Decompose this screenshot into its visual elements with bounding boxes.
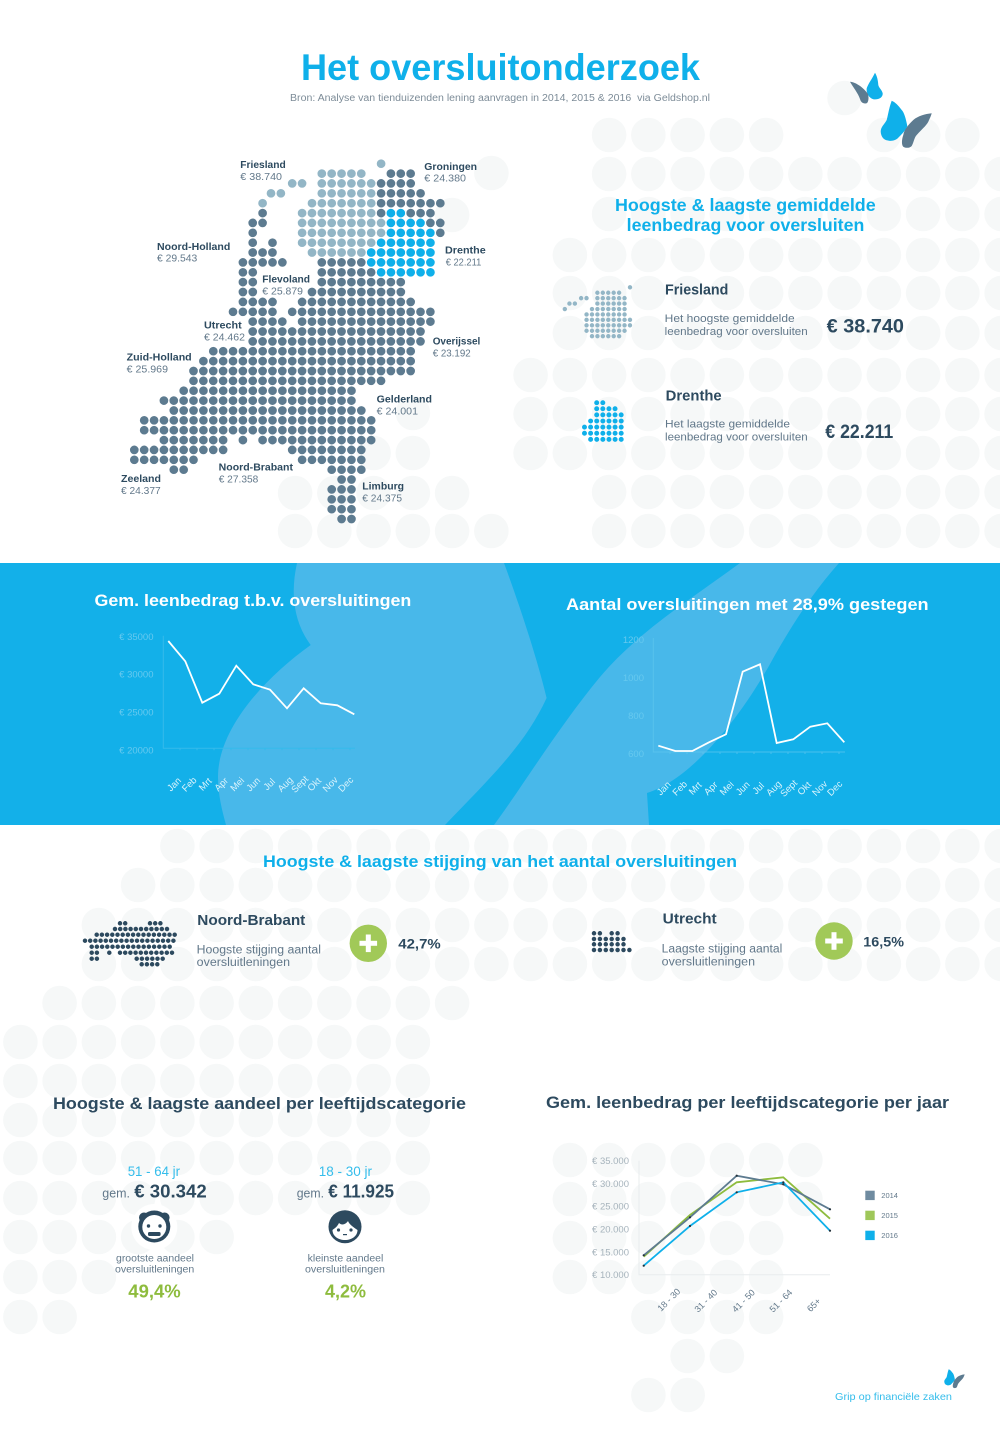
label: Gelderland: € 24.001	[377, 406, 418, 418]
Utrecht name: Utrecht	[663, 911, 717, 927]
label: Noord-Holland: € 29.543	[157, 253, 197, 265]
map labels	[121, 159, 486, 505]
icon: Noord-Brabant mini map	[85, 923, 175, 964]
Drenthe description: Het laagste gemiddelde	[665, 419, 790, 431]
column: 18 - 30 jr: 4,2%	[325, 1281, 366, 1301]
line chart: average loan per month: Jul	[262, 777, 278, 793]
icon: Utrecht mini map	[594, 933, 630, 950]
label: Limburg: € 24.375	[362, 493, 402, 505]
line chart: number of refinancings per month: Apr	[702, 780, 720, 798]
label: Flevoland	[262, 273, 310, 297]
label: Groningen	[424, 161, 477, 185]
icon: Friesland mini map	[565, 287, 630, 336]
Friesland description	[665, 313, 808, 338]
Drenthe description: leenbedrag voor oversluiten	[665, 432, 808, 444]
line chart: age categories: 31 - 40	[692, 1287, 719, 1314]
line chart: age categories	[592, 1156, 831, 1314]
heading: Hoogste & laagste stijging van het aantal oversluitingen	[263, 852, 737, 871]
line chart: average loan per month: Dec	[336, 775, 356, 795]
line chart: average loan per month: Okt	[306, 775, 324, 794]
line chart: number of refinancings per month: Aug	[764, 779, 784, 799]
line chart: number of refinancings per month: Feb	[671, 779, 690, 798]
label: Noord-Brabant	[219, 461, 293, 485]
heading: leenbedrag voor oversluiten	[627, 215, 864, 235]
icon: butterflies	[850, 73, 932, 148]
line chart: average loan per month: Apr	[213, 776, 231, 794]
line chart: average loan per month: Feb	[180, 775, 199, 794]
label: Noord-Holland	[157, 241, 230, 265]
line chart: average loan per month: € 35000	[119, 632, 154, 643]
line chart: number of refinancings per month	[623, 635, 845, 800]
line chart: average loan per month: € 30000	[119, 670, 154, 680]
heading: Hoogste & laagste gemiddelde	[615, 195, 876, 215]
Noord-Brabant description	[197, 944, 321, 969]
label: Gelderland: Gelderland	[377, 393, 432, 405]
Friesland name: Friesland	[665, 283, 728, 299]
value 16,5%: 16,5%	[863, 934, 905, 950]
column: 18 - 30 jr: oversluitleningen	[305, 1265, 385, 1276]
line chart: average loan per month: € 25000	[119, 707, 154, 718]
label: Drenthe: € 22.211	[446, 256, 481, 268]
legend	[865, 1191, 898, 1240]
label: Drenthe	[445, 244, 486, 268]
label: Zeeland	[121, 473, 161, 497]
label: Overijssel: Overijssel	[433, 336, 480, 348]
Noord-Brabant description: oversluitleningen	[197, 957, 290, 969]
label: Noord-Brabant: Noord-Brabant	[219, 461, 293, 473]
line chart: number of refinancings per month: Mei	[718, 779, 737, 798]
icon: plus	[815, 922, 853, 960]
column: 51 - 64 jr	[102, 1163, 207, 1301]
label: Groningen: € 24.380	[424, 173, 466, 185]
heading	[615, 195, 876, 235]
line chart: average loan per month: Jan	[165, 775, 184, 794]
Friesland description: Het hoogste gemiddelde	[665, 313, 795, 325]
label: Limburg: Limburg	[362, 481, 404, 493]
icon: footer butterfly	[944, 1369, 965, 1388]
label: Gelderland	[377, 393, 432, 418]
Friesland amount: € 38.740	[827, 316, 904, 337]
label: Flevoland: Flevoland	[262, 273, 310, 285]
column: 18 - 30 jr	[297, 1163, 394, 1301]
icon: Drenthe mini map	[584, 403, 621, 439]
label: Zeeland: Zeeland	[121, 473, 161, 485]
line chart: age categories: 18 - 30	[655, 1286, 682, 1313]
Drenthe name: Drenthe	[666, 388, 722, 404]
label: Friesland	[240, 159, 286, 183]
map region: Drenthe	[371, 213, 430, 272]
label: Zuid-Holland: Zuid-Holland	[127, 352, 192, 364]
line chart: average loan per month: Nov	[321, 775, 341, 795]
label: Flevoland: € 25.879	[262, 285, 303, 297]
line chart: age categories: € 30.000	[592, 1179, 629, 1190]
column: 18 - 30 jr: 18 - 30 jr	[319, 1163, 372, 1179]
column: 18 - 30 jr: gem.	[297, 1186, 324, 1201]
column: 18 - 30 jr: kleinste aandeel	[308, 1254, 383, 1265]
label: Groningen: Groningen	[424, 161, 477, 173]
Utrecht description: oversluitleningen	[662, 956, 755, 968]
panel: highest and lowest increase	[85, 852, 905, 969]
line chart: number of refinancings per month: 600	[628, 749, 644, 760]
line chart: age categories: € 35.000	[592, 1156, 629, 1167]
line chart: number of refinancings per month: Dec	[825, 779, 845, 799]
column: 51 - 64 jr: 51 - 64 jr	[128, 1163, 180, 1179]
map region: Friesland	[263, 164, 381, 252]
value 42,7%: 42,7%	[398, 936, 441, 952]
label: Overijssel	[433, 336, 480, 360]
line chart: number of refinancings per month: 800	[628, 711, 644, 722]
panel: share per age category	[53, 1094, 466, 1301]
label: Zuid-Holland	[127, 352, 192, 376]
heading: Hoogste & laagste aandeel per leeftijdscategorie	[53, 1094, 466, 1113]
label: Utrecht: € 24.462	[204, 332, 245, 344]
panel: highest and lowest average loan	[565, 195, 904, 444]
line chart: age categories: 41 - 50	[730, 1287, 757, 1314]
column: 51 - 64 jr: grootste aandeel	[116, 1254, 194, 1265]
column: 51 - 64 jr: oversluitleningen	[115, 1265, 194, 1276]
legend: 2016	[881, 1231, 898, 1240]
label: Zeeland: € 24.377	[121, 485, 161, 497]
line chart: average loan per month: € 20000	[119, 745, 154, 756]
Utrecht description	[662, 943, 782, 968]
line chart: age categories: 65+	[805, 1296, 823, 1314]
heading: number of refinancings chart: Aantal oversluitingen met 28,9% gestegen	[566, 595, 929, 614]
line chart: average loan per month: Jun	[244, 775, 263, 794]
line chart: average loan per month: Mrt	[197, 776, 215, 793]
line chart: age categories: € 10.000	[592, 1270, 629, 1281]
label: Overijssel: € 23.192	[433, 348, 471, 360]
line chart: number of refinancings per month: 1200	[623, 635, 644, 646]
label: Drenthe: Drenthe	[445, 244, 486, 256]
label: Friesland: Friesland	[240, 159, 286, 171]
line chart: number of refinancings per month: Okt	[796, 779, 814, 798]
line chart: average loan per month: Mei	[228, 775, 247, 794]
Friesland description: leenbedrag voor oversluiten	[665, 326, 808, 338]
line chart: number of refinancings per month: Jul	[751, 781, 767, 797]
line chart: age categories: € 20.000	[592, 1224, 629, 1236]
column: 51 - 64 jr: gem.	[102, 1186, 130, 1201]
panel: average loan per age category per year	[546, 1093, 949, 1314]
Drenthe description	[665, 419, 808, 444]
label: Noord-Brabant: € 27.358	[219, 473, 258, 485]
Drenthe amount: € 22.211	[825, 422, 894, 443]
label: Noord-Holland: Noord-Holland	[157, 241, 230, 253]
Utrecht description: Laagste stijging aantal	[662, 943, 782, 955]
label: Limburg	[362, 481, 404, 505]
line chart: number of refinancings per month: 1000	[623, 673, 644, 684]
label: Zuid-Holland: € 25.969	[127, 364, 168, 376]
line chart: number of refinancings per month: Mrt	[687, 780, 705, 797]
line chart: age categories: 51 - 64	[767, 1287, 794, 1314]
label: Friesland: € 38.740	[240, 171, 282, 183]
legend: 2014	[881, 1191, 898, 1200]
label: Utrecht	[204, 320, 245, 344]
icon: plus	[350, 925, 387, 962]
footer tagline: Grip op financiële zaken	[835, 1391, 952, 1403]
line chart: number of refinancings per month: Nov	[810, 779, 830, 799]
map of the Netherlands by province	[134, 164, 440, 519]
map region: other provinces	[134, 174, 440, 519]
Noord-Brabant name: Noord-Brabant	[197, 913, 305, 929]
line chart: average loan per month	[119, 632, 356, 796]
column: 51 - 64 jr: 49,4%	[128, 1281, 181, 1301]
icon: young face	[328, 1210, 362, 1243]
panel: blue chart band	[0, 563, 1000, 825]
label: Utrecht: Utrecht	[204, 320, 242, 332]
decorative butterfly wings	[218, 563, 839, 825]
line chart: number of refinancings per month: Jun	[734, 779, 753, 798]
column: 18 - 30 jr: € 11.925	[328, 1182, 394, 1202]
source line: Bron: Analyse van tienduizenden lening aanvragen in 2014, 2015 & 2016 via Geldshop.nl	[290, 93, 710, 104]
line chart: average loan per month: Sept	[289, 774, 311, 796]
legend: 2015	[881, 1211, 898, 1220]
Noord-Brabant description: Hoogste stijging aantal	[197, 944, 321, 956]
line chart: average loan per month: Aug	[276, 775, 296, 795]
heading: average loan chart: Gem. leenbedrag t.b.v. oversluitingen	[94, 591, 411, 610]
line chart: age categories: € 25.000	[592, 1202, 629, 1212]
title: Het oversluitonderzoek	[301, 46, 700, 88]
line chart: number of refinancings per month: Jan	[655, 779, 674, 798]
column: 51 - 64 jr: € 30.342	[134, 1182, 207, 1202]
icon: older face	[131, 1204, 177, 1250]
line chart: number of refinancings per month: Sept	[778, 778, 800, 800]
line chart: age categories: € 15.000	[592, 1248, 629, 1258]
heading: Gem. leenbedrag per leeftijdscategorie per jaar	[546, 1093, 949, 1112]
